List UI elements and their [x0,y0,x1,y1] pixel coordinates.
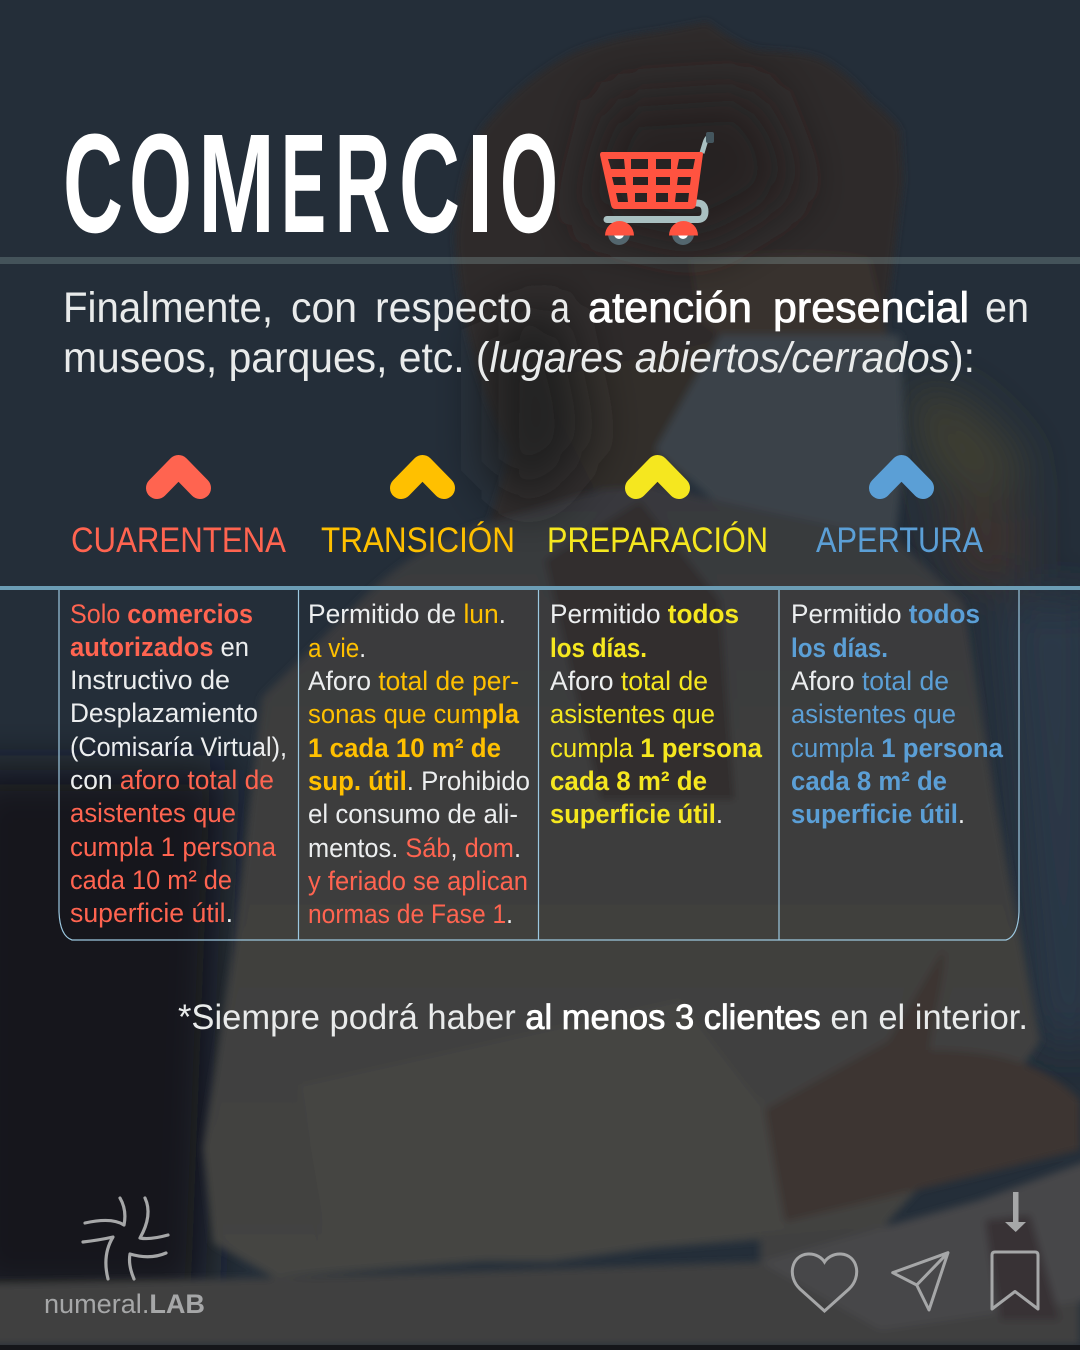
column text: transicion: Aforo total de per- [308,666,519,696]
intro text: a [550,284,570,332]
column text: transicion: y feriado se aplican [308,866,528,896]
column text: cuarentena: superficie útil. [70,898,233,928]
column text: preparacion: superficie útil. [550,799,723,829]
icon: bookmark [992,1252,1038,1309]
column text: apertura: cada 8 m² de [791,766,947,796]
column text: apertura: Permitido todos [791,599,980,629]
title: C [63,104,123,262]
column text: cuarentena: Solo comercios [70,599,253,629]
column text: cuarentena: cada 10 m² de [70,865,232,895]
title: E [281,104,326,262]
column text: apertura: los días. [791,633,888,663]
column text: transicion: normas de Fase 1. [308,899,513,929]
title: O [129,104,192,262]
icon: shopping cart [600,132,714,245]
column text: preparacion [550,599,762,829]
column text: apertura: asistentes que [791,699,956,729]
column text: preparacion: los días. [550,633,647,663]
intro text: museos, parques, etc. (lugares abiertos/cerrados): [63,334,975,382]
column text: cuarentena: con aforo total de [70,765,274,795]
column text: transicion: sonas que cumpla [308,699,519,729]
column header: transicion: TRANSICIÓN [321,521,515,560]
column header: cuarentena [71,466,287,560]
column text: transicion [308,599,530,929]
title: C [399,104,460,262]
column text: transicion: Permitido de lun. [308,599,506,629]
column header: cuarentena: CUARENTENA [71,521,287,560]
column header: transicion [321,466,515,560]
column text: cuarentena: Desplazamiento [70,698,258,728]
logo: numeral.LAB: numeral.LAB [44,1289,205,1319]
column text: transicion: el consumo de ali- [308,799,518,829]
intro text: presencial [773,284,969,332]
intro text: en [985,284,1029,332]
column header: apertura: APERTURA [816,521,984,560]
logo: numeral.LAB [44,1198,205,1319]
intro text [63,284,1029,382]
title: O [500,104,558,262]
footnote: *Siempre podrá haber al menos 3 clientes en el interior. [178,997,1028,1037]
table frame [0,586,1080,940]
icon: heart [792,1254,857,1311]
title rule [0,257,1080,264]
column text: cuarentena: cumpla 1 persona [70,832,276,862]
column text: apertura: superficie útil. [791,799,965,829]
column text: transicion: a vie. [308,633,366,663]
column text: apertura [791,599,1003,829]
column text: preparacion: Aforo total de [550,666,708,696]
column text: preparacion: asistentes que [550,699,715,729]
column text: cuarentena: autorizados en [70,632,249,662]
column text: preparacion: Permitido todos [550,599,739,629]
intro text: atención [588,284,752,332]
title: I [466,104,494,262]
intro text: con [291,284,357,332]
column text: cuarentena: asistentes que [70,798,236,828]
intro text: respecto [375,284,532,332]
column text: transicion: mentos. Sáb, dom. [308,833,521,863]
title: M [198,104,275,262]
column text: cuarentena [70,599,287,928]
intro text: Finalmente, [63,284,273,332]
column header: preparacion [547,466,768,560]
column text: transicion: 1 cada 10 m² de [308,733,501,763]
column header: apertura [816,466,984,560]
column text: cuarentena: (Comisaría Virtual), [70,732,287,762]
column header: preparacion: PREPARACIÓN [547,521,768,560]
column text: preparacion: cumpla 1 persona [550,733,762,763]
column text: apertura: cumpla 1 persona [791,733,1003,763]
column text: transicion: sup. útil. Prohibido [308,766,530,796]
column text: preparacion: cada 8 m² de [550,766,707,796]
icon: paper plane [893,1253,948,1310]
column text: cuarentena: Instructivo de [70,665,230,695]
arrow: points to bookmark [1005,1192,1026,1232]
column text: apertura: Aforo total de [791,666,949,696]
title: R [334,104,390,262]
